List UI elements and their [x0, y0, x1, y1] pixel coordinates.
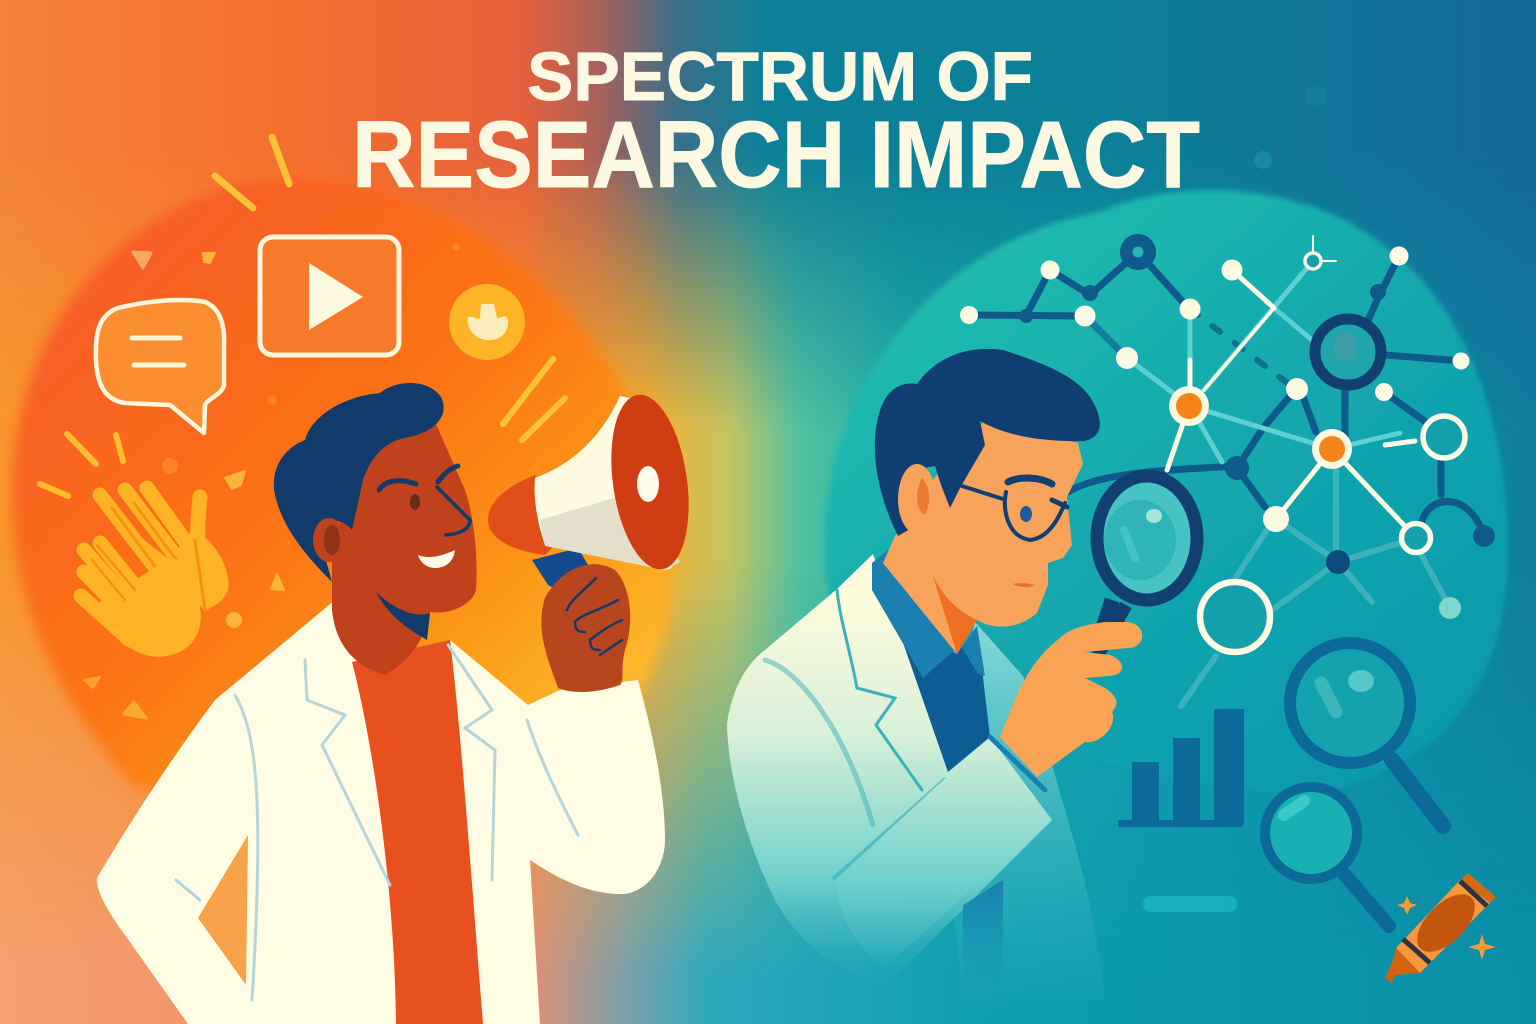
communicator neck shadow: [376, 592, 430, 640]
analyst glasses and brow: [962, 478, 1067, 540]
bar chart icon: [1118, 709, 1244, 827]
network hollow rings: [1200, 236, 1465, 652]
network ring large: [1315, 319, 1381, 385]
network dark edges: [970, 252, 1484, 536]
communicator brow and eye: [379, 466, 470, 535]
network pale edges: [1127, 261, 1400, 462]
network light edges: [1167, 270, 1416, 538]
analyst hair: [875, 349, 1100, 536]
analyst dark shirt: [900, 626, 990, 772]
icon: megaphone rays: [503, 359, 565, 440]
icon: video play box: [260, 237, 399, 355]
analyst face and neck: [883, 420, 1083, 654]
communicator hand: [541, 564, 630, 692]
icon: clap sparkle lines: [40, 434, 123, 496]
analyst shirt lower: [963, 880, 1003, 1010]
icon: small magnifier: [1265, 787, 1389, 926]
network junctions: [1019, 284, 1495, 574]
analyst mouth: [1013, 583, 1035, 587]
person: science communicator: [97, 383, 665, 1024]
network cream nodes: [960, 246, 1470, 619]
analyst hand: [1000, 622, 1142, 777]
confetti shapes: [84, 243, 460, 718]
pale rounded bar: [1143, 896, 1237, 912]
communicator shirt: [352, 640, 483, 1024]
icon: crayon with sparkles: [1385, 873, 1496, 983]
megaphone cone: [535, 396, 672, 570]
megaphone handle: [532, 548, 600, 590]
analyst back coat: [940, 622, 1105, 1000]
icon: megaphone: [488, 390, 699, 590]
icon: large magnifier: [1290, 643, 1443, 826]
communicator lab coat: [97, 600, 665, 1024]
analyst ear: [898, 464, 936, 534]
communicator hair: [274, 383, 444, 582]
title: SPECTRUM OF: [527, 38, 1033, 115]
icon: hand-held magnifier: [1095, 476, 1197, 660]
analyst collar: [872, 547, 985, 678]
communicator coat gap: [198, 835, 248, 985]
communicator lapel lines: [176, 645, 578, 1000]
teal glow shape behind analyst: [825, 190, 1508, 792]
icon: burst rays above video icon: [215, 137, 289, 208]
icon: speech bubble: [96, 300, 224, 433]
communicator smile: [418, 550, 455, 568]
analyst sleeve: [835, 737, 1052, 965]
icon: clapping hands: [81, 488, 229, 657]
title: [352, 38, 1200, 208]
network graph: [960, 234, 1495, 706]
orange glow shape behind communicator: [12, 178, 673, 790]
megaphone mouth: [601, 390, 699, 574]
network orange hubs: [1169, 386, 1352, 469]
analyst neck shadow: [933, 576, 977, 654]
person: analyst: [727, 349, 1105, 1010]
icon: like badge: [449, 284, 525, 360]
analyst front coat: [727, 554, 1052, 985]
network hub dark: [1120, 234, 1156, 270]
title: RESEARCH IMPACT: [352, 102, 1200, 208]
decorative teal dots top right: [1254, 85, 1327, 169]
communicator neck and face: [332, 424, 477, 675]
analyst coat lines: [765, 590, 945, 878]
megaphone rear bulb: [488, 475, 560, 555]
communicator ear: [313, 518, 345, 562]
